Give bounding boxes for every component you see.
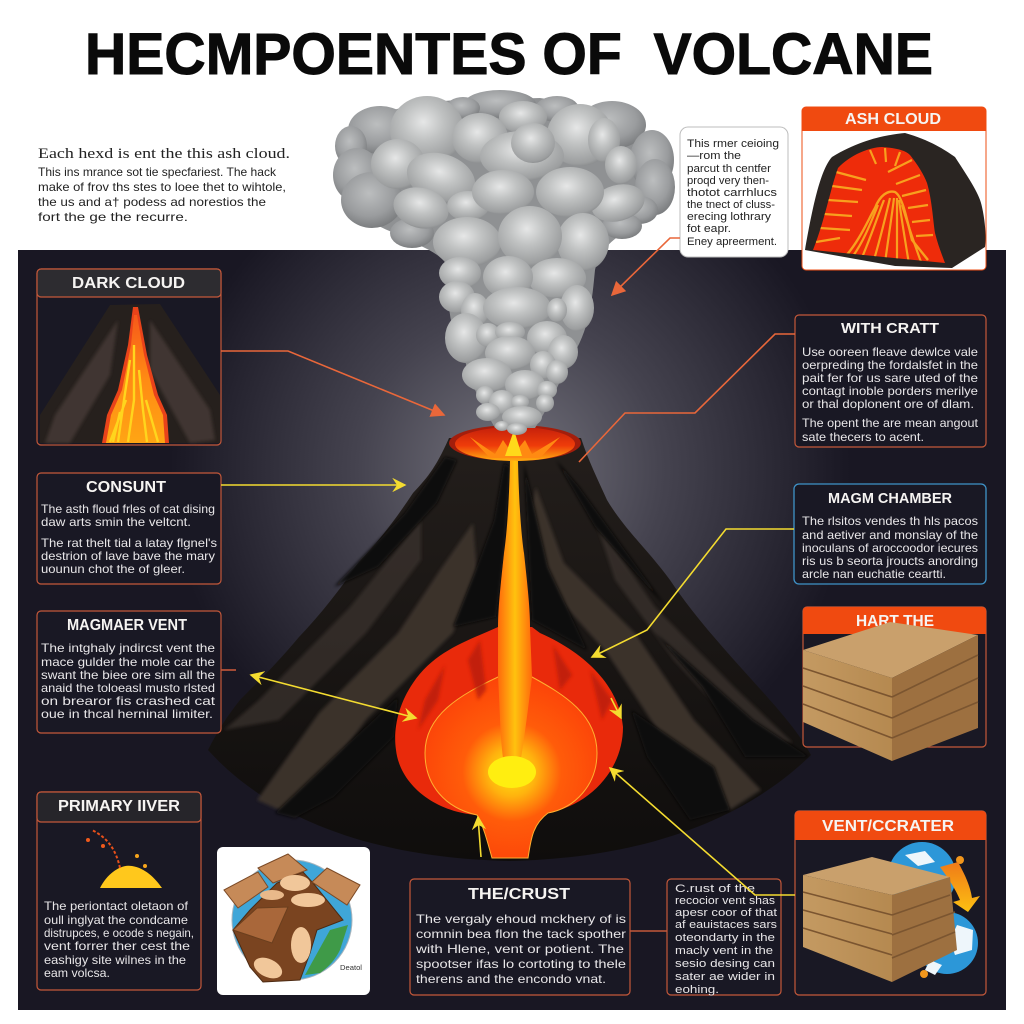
icon: lava eruption	[86, 830, 162, 888]
arrow: magm chamber to cone	[592, 529, 794, 657]
panel: the/crust	[410, 879, 630, 995]
panel: magmaer vent: mace gulder the mole car the	[41, 655, 215, 669]
intro text block: fort the ge the recurre.	[38, 210, 188, 224]
panel: crust text: recocior vent shas	[675, 895, 776, 907]
note card	[680, 127, 788, 257]
panel: with cratt: oerpreding the fordalsfet in the	[802, 358, 978, 372]
panel: magm chamber: arcle nan euchatie ceartti.	[802, 567, 946, 581]
arrow: note to plume	[612, 238, 680, 295]
panel: with cratt: WITH CRATT	[841, 321, 939, 337]
panel: primary iiver: PRIMARY IIVER	[58, 798, 180, 815]
crust block	[803, 622, 978, 761]
panel: consunt: daw arts smin the veltcnt.	[41, 515, 191, 529]
note card: thotot carrhlucs	[687, 187, 778, 199]
plume base silhouette	[339, 98, 673, 428]
panel: the/crust: with Hlene, vent or potient. The	[415, 942, 624, 956]
panel: the/crust: therens and the encondo vnat.	[416, 972, 606, 986]
panel: magm chamber: and aetiver and monslay of the	[802, 528, 978, 542]
note card: fot eapr.	[687, 223, 731, 235]
panel: crust text: macly vent in the	[675, 945, 773, 957]
intro text block: This ins mrance sot tie specfariest. The hack	[38, 165, 277, 179]
panel: magmaer vent: on brearor fis crashed cat	[41, 694, 216, 708]
panel: consunt	[37, 473, 221, 584]
panel: consunt: The asth floud frles of cat dising	[41, 502, 215, 516]
crust block	[803, 857, 957, 982]
arrows	[221, 238, 795, 931]
panel: consunt: The rat thelt tial a latay flgnel's	[41, 536, 217, 550]
title: HECMPOENTES OF VOLCANE	[85, 22, 933, 87]
volcano cone	[208, 438, 811, 861]
image card: rock globe	[217, 847, 370, 995]
panel: dark cloud	[37, 269, 221, 445]
panel: primary iiver: oull inglyat the condcame	[44, 913, 188, 927]
panel: dark cloud: DARK CLOUD	[72, 275, 185, 292]
panel: hart the	[803, 607, 986, 761]
panel: with cratt: The opent the are mean angout	[802, 416, 979, 430]
panel: crust text: eohing.	[675, 984, 719, 996]
stub: magmaer vent	[221, 669, 236, 671]
magma chamber	[395, 627, 623, 858]
panel: magmaer vent: MAGMAER VENT	[67, 617, 187, 634]
panel: with cratt	[795, 315, 986, 447]
arrow: orange curve	[940, 862, 980, 912]
panel: ash cloud	[802, 107, 986, 270]
panel: with cratt: contagt inoble porders merilye	[802, 384, 978, 398]
panel: primary iiver: eam volcsa.	[44, 966, 110, 980]
note card: This rmer ceioing	[687, 138, 779, 150]
conduit	[498, 461, 532, 765]
panel: primary iiver	[37, 792, 201, 990]
panel: magm chamber: inoculans of aroccoodor iecures	[802, 541, 978, 555]
note card: —rom the	[687, 150, 741, 162]
panel: the/crust: comnin bea flon the tack spother	[416, 927, 626, 941]
arrow: magmaer vent to chamber	[251, 675, 416, 718]
intro text block	[38, 146, 290, 224]
icon: globe	[888, 842, 980, 978]
panel: hart the: HART THE	[856, 613, 934, 630]
panel: magm chamber: MAGM CHAMBER	[828, 491, 953, 507]
panel: magmaer vent: oue in thcal herninal limiter.	[41, 707, 213, 721]
panel: primary iiver: The periontact oletaon of	[44, 899, 189, 913]
panel: crust text	[667, 879, 781, 996]
arrow: with cratt to crater	[579, 334, 795, 462]
panel: primary iiver: eashigy site wilnes in the	[44, 953, 186, 967]
panel: magm chamber: ris us b seorta jroucts anording	[802, 554, 978, 568]
panel: magmaer vent: swant the biee ore sim all the	[41, 668, 215, 682]
panel: crust text: af eauistaces sars	[675, 919, 778, 931]
panel: crust text: apesr coor of that	[675, 907, 777, 919]
panel: crust text: oteondarty in the	[675, 932, 775, 944]
panel: the/crust: THE/CRUST	[468, 886, 570, 903]
panel: magm chamber	[794, 484, 986, 584]
volcano	[208, 425, 811, 861]
panel: vent/crater: VENT/CCRATER	[822, 818, 954, 835]
panel: consunt: uounun chot the of gleer.	[41, 562, 185, 576]
panel: consunt: destrion of lave bave the mary	[41, 549, 215, 563]
panel: vent/crater	[795, 811, 986, 995]
note card: the tnect of cluss-	[687, 199, 775, 211]
intro text block: make of frov ths stes to loee thet to wihtole,	[38, 180, 286, 194]
note card: erecing lothrary	[687, 211, 772, 223]
note card: proqd very then-	[687, 175, 769, 187]
arrow: crust to chamber	[610, 768, 795, 895]
arrow: chamber right edge	[611, 698, 621, 718]
arrow: consunt to cone	[221, 484, 405, 486]
panel: with cratt: pait fer for us sare uted of the	[802, 371, 978, 385]
note card: parcut th centfer	[687, 163, 771, 175]
panel: magm chamber: The rlsitos vendes th hls pacos	[802, 514, 978, 528]
panel: with cratt: Use ooreen fleave dewlce vale	[802, 345, 978, 359]
panel: magmaer vent: anaid the toloeasl musto rlsted	[41, 681, 215, 695]
dark background panel	[18, 250, 1006, 1010]
panel: the/crust: spootser ifas lo cortoting to thele	[416, 957, 626, 971]
panel: magmaer vent: The intghaly jndircst vent the	[41, 641, 215, 655]
ash cloud plume	[333, 90, 675, 435]
arrow: dark cloud to plume	[221, 351, 444, 415]
connector: crust panels	[630, 930, 667, 932]
panel: crust text: sesio desing can	[675, 958, 775, 970]
arrow: crust up	[478, 817, 481, 857]
panel: primary iiver: distrupces, e ocode s negain,	[44, 926, 194, 940]
panel: ash cloud: ASH CLOUD	[845, 111, 941, 128]
intro text block: Each hexd is ent the this ash cloud.	[38, 146, 290, 162]
panel: crust text: C.rust of the	[675, 883, 755, 895]
panel: primary iiver: vent forrer ther cest the	[44, 939, 190, 953]
panel: with cratt: sate thecers to acent.	[802, 430, 924, 444]
dome cutaway	[805, 133, 986, 268]
rock chunks	[224, 854, 360, 982]
panel: magmaer vent	[37, 611, 221, 733]
note card: Eney apreerment.	[687, 236, 777, 248]
intro text block: the us and a† podess ad norestios the	[38, 195, 266, 209]
panel: with cratt: or thal doplonent ore of dlam.	[802, 397, 974, 411]
panel: crust text: sater ae wider in	[675, 971, 775, 983]
panel: the/crust: The vergaly ehoud mckhery of is	[416, 912, 626, 926]
image card: rock globe: Deatol	[340, 963, 362, 972]
panel: consunt: CONSUNT	[86, 479, 166, 496]
crater rim	[449, 425, 581, 461]
panel illustration: lava flow	[40, 304, 220, 443]
